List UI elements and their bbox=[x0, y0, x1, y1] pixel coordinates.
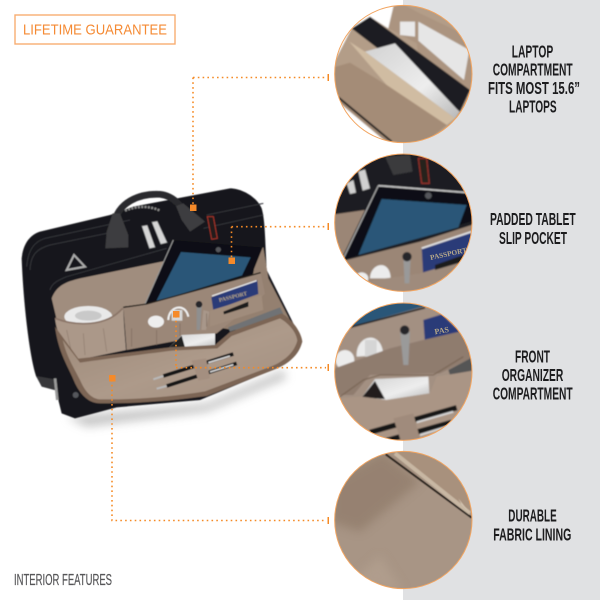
interior back lining bbox=[52, 261, 167, 360]
leader line: fabric lining bbox=[109, 375, 329, 524]
handle tabs bbox=[105, 213, 128, 248]
leader line: organizer compartment bbox=[173, 311, 329, 371]
label: laptop compartment: LAPTOP bbox=[512, 41, 553, 61]
product photo: open briefcase bbox=[22, 188, 302, 427]
leader line: tablet pocket bbox=[228, 223, 329, 264]
silver device bbox=[228, 307, 283, 332]
pocket pleats bbox=[132, 313, 207, 347]
D-ring bbox=[67, 255, 85, 270]
leader line: laptop compartment bbox=[190, 74, 329, 211]
front flap bbox=[55, 313, 302, 403]
label: laptop compartment: LAPTOPS bbox=[509, 96, 557, 116]
pens bbox=[163, 354, 237, 386]
circle detail: tablet slip pocket bbox=[334, 154, 472, 292]
cable spool bbox=[64, 306, 112, 327]
bag body bbox=[22, 188, 302, 418]
circle detail: front organizer compartment: PAS bbox=[434, 325, 450, 336]
label: padded tablet slip pocket bbox=[490, 209, 576, 248]
mesh pocket bbox=[55, 308, 126, 360]
pen strap bbox=[192, 358, 210, 381]
camera bbox=[169, 333, 215, 348]
caption: interior features: INTERIOR FEATURES bbox=[14, 572, 112, 589]
label: durable fabric lining bbox=[493, 506, 571, 545]
bag body: PASSPORT bbox=[218, 291, 248, 304]
organizer panel bbox=[123, 273, 265, 350]
pen in sleeve bbox=[197, 303, 202, 330]
badge: lifetime guarantee: LIFETIME GUARANTEE bbox=[23, 22, 167, 38]
circle detail: laptop compartment bbox=[334, 4, 472, 144]
circle detail: front organizer compartment bbox=[334, 302, 472, 441]
handle bbox=[114, 194, 193, 225]
label: front organizer compartment bbox=[493, 347, 573, 403]
red zip pull bbox=[207, 217, 217, 239]
grey right background panel bbox=[403, 0, 600, 600]
label: laptop compartment bbox=[488, 41, 580, 116]
zip pulls bbox=[142, 221, 167, 249]
badge: lifetime guarantee bbox=[15, 15, 175, 44]
circle detail: durable fabric lining bbox=[334, 450, 472, 590]
passport bbox=[211, 280, 258, 311]
bag shadow bbox=[67, 370, 287, 427]
label: durable fabric lining: DURABLE bbox=[508, 506, 557, 526]
tablet bbox=[145, 240, 263, 304]
label: front organizer compartment: FRONT bbox=[515, 347, 550, 367]
side zipper bbox=[55, 378, 57, 400]
circle detail: tablet slip pocket: PASSPORT bbox=[429, 245, 468, 262]
earbuds and charger bbox=[148, 316, 164, 328]
